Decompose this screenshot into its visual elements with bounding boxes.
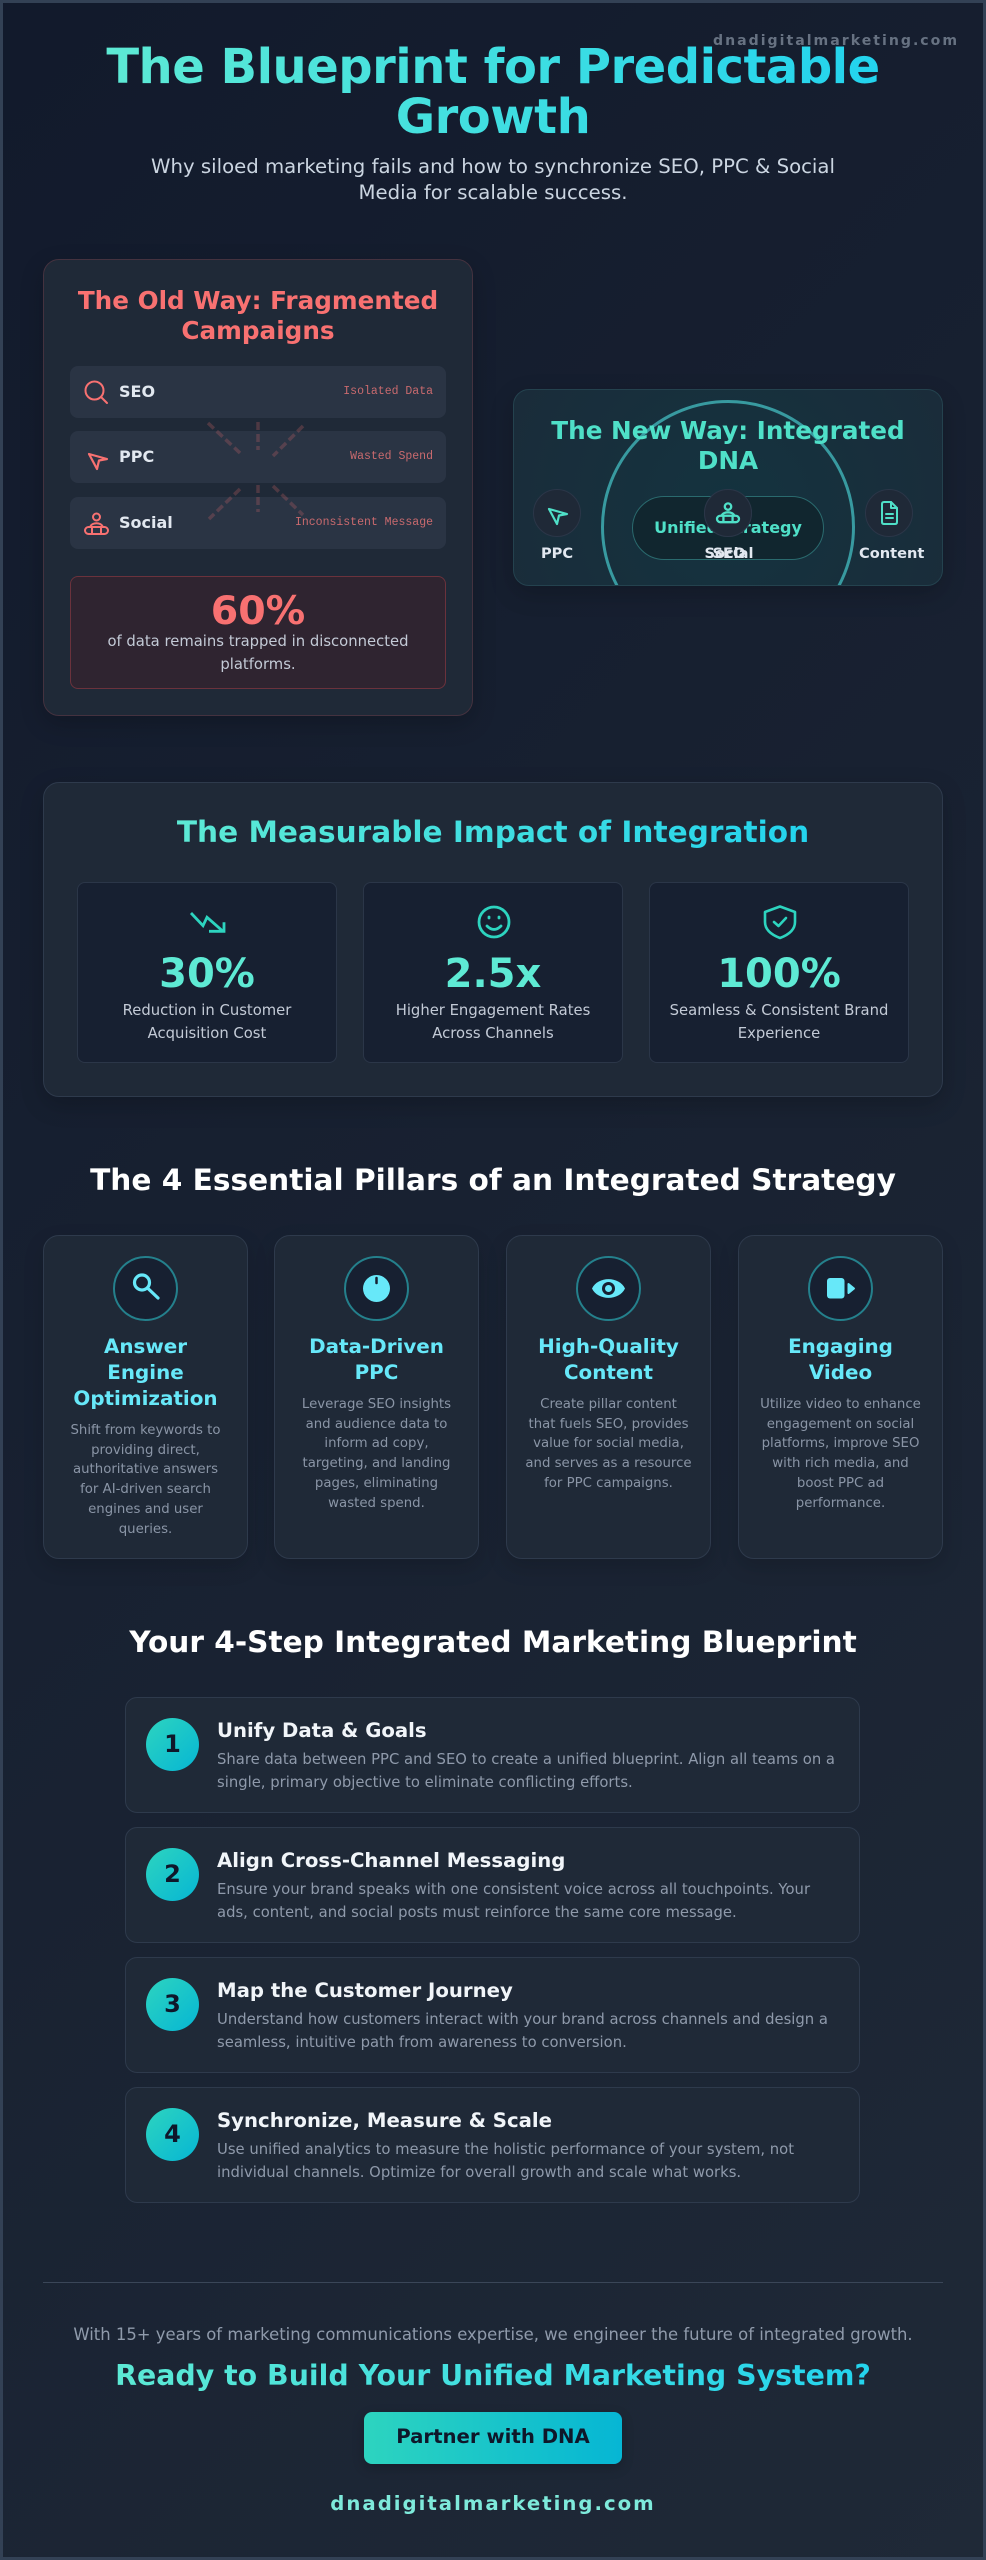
ppc label: PPC: [541, 545, 573, 562]
pillar text: value for social media,: [533, 1436, 684, 1451]
step 1: [125, 1697, 860, 1813]
row: SEO: SEO: [119, 382, 155, 401]
step 4: [125, 2087, 860, 2203]
value: 30%: [159, 951, 255, 997]
new way heading: DNA: [698, 446, 758, 475]
pillar title: Optimization: [73, 1387, 218, 1410]
description: Higher Engagement Rates: [396, 1002, 590, 1019]
node: SEO: [708, 496, 750, 562]
footer url: dnadigitalmarketing.com: [330, 2492, 656, 2515]
description: Reduction in Customer: [123, 1002, 291, 1019]
icon: trending down: [190, 912, 226, 933]
icon circle: [576, 1256, 641, 1321]
step text: Understand how customers interact with your brand across channels and design a: [217, 2011, 828, 2028]
icon: eye: [592, 1279, 625, 1298]
pillar title: [73, 1335, 218, 1410]
description: Seamless & Consistent Brand: [670, 1002, 888, 1019]
icon: shield check: [764, 905, 796, 940]
pillar text: Leverage SEO insights: [302, 1397, 451, 1412]
stat card: 30%: [77, 882, 337, 1063]
step text: Share data between PPC and SEO to create a unified blueprint. Align all teams on a: [217, 1751, 835, 1768]
pillar text: Create pillar content: [540, 1397, 677, 1412]
description: [123, 1002, 292, 1042]
icon: search: [84, 380, 108, 404]
icon circle: [344, 1256, 409, 1321]
icon: document: [881, 501, 898, 525]
stat value: 60%: [211, 588, 305, 634]
statistic callout: 60%: [70, 576, 446, 689]
icon circle: [113, 1256, 178, 1321]
step text: Ensure your brand speaks with one consistent voice across all touchpoints. Your: [217, 1881, 810, 1898]
social icon circle: [704, 489, 752, 537]
pillar title: [538, 1335, 679, 1384]
step title: Map the Customer Journey: [217, 1978, 513, 2002]
new way heading: [551, 416, 905, 475]
stat description: of data remains trapped in disconnected: [107, 633, 409, 650]
pillar: data-driven ppc: [274, 1235, 479, 1559]
cta button: Partner with DNA: [396, 2425, 590, 2448]
content label: Content: [859, 545, 924, 562]
pillar title: Engine: [107, 1361, 184, 1384]
watermark: dnadigitalmarketing.com: [713, 33, 959, 49]
pillar title: Content: [564, 1361, 653, 1384]
row: Social: [70, 497, 446, 549]
cta button: [364, 2412, 622, 2464]
old way heading: [78, 286, 438, 345]
pillar text: targeting, and landing: [303, 1456, 450, 1471]
pillar title: [788, 1335, 893, 1384]
icon: pointer: [88, 452, 108, 470]
row: SEO: Isolated Data: [343, 385, 433, 398]
pillar text: queries.: [119, 1522, 172, 1537]
pillar text: inform ad copy,: [324, 1436, 429, 1451]
pillar title: Answer: [104, 1335, 187, 1358]
title: [95, 42, 891, 148]
blueprint heading: Your 4-Step Integrated Marketing Blueprint: [129, 1625, 857, 1659]
pillar text: wasted spend.: [328, 1496, 425, 1511]
pillars heading: The 4 Essential Pillars of an Integrated Strategy: [90, 1163, 896, 1197]
pillar text: performance.: [796, 1496, 885, 1511]
row: PPC: PPC: [119, 447, 154, 466]
step 2: [125, 1827, 860, 1943]
social label: Social: [704, 545, 754, 562]
pillar text: platforms, improve SEO: [762, 1436, 919, 1451]
subtitle: Why siloed marketing fails and how to synchronize SEO, PPC & Social: [151, 155, 835, 178]
node: PPC: [533, 489, 581, 562]
row: SEO: [70, 366, 446, 418]
pillar: answer engine optimization: [43, 1235, 248, 1559]
row: Social: Inconsistent Message: [295, 516, 433, 529]
icon: people: [716, 502, 740, 524]
cta heading: Ready to Build Your Unified Marketing System?: [115, 2359, 871, 2392]
seo label: SEO: [713, 545, 745, 562]
description: Across Channels: [432, 1025, 554, 1042]
step number: 3: [164, 1990, 181, 2018]
step text: seamless, intuitive path from awareness to conversion.: [217, 2034, 627, 2051]
row: PPC: Wasted Spend: [350, 450, 433, 463]
pillar text: engines and user: [88, 1502, 203, 1517]
pillar title: High-Quality: [538, 1335, 679, 1358]
stat card: 2.5x: [363, 882, 623, 1063]
icon: smile: [478, 906, 510, 938]
pillar text: Shift from keywords to: [70, 1423, 221, 1438]
pillar title: Video: [809, 1361, 872, 1384]
old way heading: The Old Way: Fragmented: [78, 286, 438, 315]
step text: [217, 1881, 810, 1921]
pillar text: [525, 1397, 692, 1491]
pillar: engaging video: [738, 1235, 943, 1559]
new way heading: The New Way: Integrated: [551, 416, 905, 445]
step number: [146, 1848, 199, 1901]
icon circle: [808, 1256, 873, 1321]
title: The Blueprint for Predictable: [106, 39, 880, 95]
node: Content: [859, 489, 924, 562]
pillar text: pages, eliminating: [315, 1476, 438, 1491]
pillar title: Data-Driven: [309, 1335, 444, 1358]
pillar text: Utilize video to enhance: [760, 1397, 921, 1412]
pillar text: engagement on social: [767, 1417, 914, 1432]
stat card: 100%: [649, 882, 909, 1063]
hub: unified strategy: Unified Strategy: [654, 518, 802, 537]
icon: magnifier: [132, 1273, 160, 1300]
pillar title: Engaging: [788, 1335, 893, 1358]
node: Social: [704, 496, 754, 562]
pillar text: [302, 1397, 451, 1511]
step text: [217, 2011, 828, 2051]
row: Social: Social: [119, 513, 173, 532]
step number: 4: [164, 2120, 181, 2148]
stat description: platforms.: [220, 656, 296, 673]
step number: [146, 2108, 199, 2161]
step text: [217, 2141, 794, 2181]
title: Growth: [396, 89, 590, 145]
stat description: [107, 633, 409, 673]
panel: the old way: [43, 259, 473, 716]
seo icon circle: [704, 489, 752, 537]
pillar text: providing direct,: [91, 1443, 200, 1458]
pillar text: [70, 1423, 221, 1537]
step title: Synchronize, Measure & Scale: [217, 2108, 552, 2132]
pillar text: for PPC campaigns.: [544, 1476, 673, 1491]
hub: unified strategy: [632, 496, 824, 560]
pillar text: boost PPC ad: [797, 1476, 884, 1491]
step title: Align Cross-Channel Messaging: [217, 1848, 565, 1872]
pillar text: with rich media, and: [772, 1456, 909, 1471]
step 3: [125, 1957, 860, 2073]
step number: [146, 1718, 199, 1771]
footer intro: With 15+ years of marketing communications expertise, we engineer the future of integrated growth.: [73, 2325, 913, 2344]
step text: Use unified analytics to measure the holistic performance of your system, not: [217, 2141, 794, 2158]
step text: [217, 1751, 835, 1791]
step text: single, primary objective to eliminate conflicting efforts.: [217, 1774, 633, 1791]
icon: people: [84, 512, 109, 535]
ppc icon circle: [533, 489, 581, 537]
pillar text: that fuels SEO, provides: [528, 1417, 688, 1432]
pillar text: [760, 1397, 921, 1511]
step text: individual channels. Optimize for overall growth and scale what works.: [217, 2164, 741, 2181]
pillar: high-quality content: [506, 1235, 711, 1559]
step number: 2: [164, 1860, 181, 1888]
row: PPC: [70, 431, 446, 483]
pillar text: and serves as a resource: [525, 1456, 692, 1471]
content icon circle: [865, 489, 913, 537]
step text: ads, content, and social posts must reinforce the same core message.: [217, 1904, 737, 1921]
step number: [146, 1978, 199, 2031]
pillar text: and audience data to: [306, 1417, 447, 1432]
pillar text: authoritative answers: [73, 1462, 218, 1477]
impact heading: The Measurable Impact of Integration: [177, 815, 809, 849]
orbit ring: [601, 400, 855, 654]
panel: the new way: [513, 389, 943, 586]
old way heading: Campaigns: [181, 316, 335, 345]
description: Experience: [738, 1025, 820, 1042]
subtitle: [151, 155, 835, 204]
description: Acquisition Cost: [148, 1025, 266, 1042]
step number: 1: [164, 1730, 181, 1758]
panel: measurable impact: [43, 782, 943, 1097]
value: 100%: [717, 951, 841, 997]
description: [396, 1002, 590, 1042]
description: [670, 1002, 888, 1042]
icon: pointer: [548, 508, 568, 526]
pillar text: for AI-driven search: [80, 1482, 211, 1497]
pillar title: PPC: [355, 1361, 398, 1384]
step title: Unify Data & Goals: [217, 1718, 427, 1742]
value: 2.5x: [445, 951, 541, 997]
icon: video: [827, 1278, 855, 1298]
icon: gauge: [363, 1275, 390, 1302]
pillar title: [309, 1335, 444, 1384]
subtitle: Media for scalable success.: [358, 181, 628, 204]
